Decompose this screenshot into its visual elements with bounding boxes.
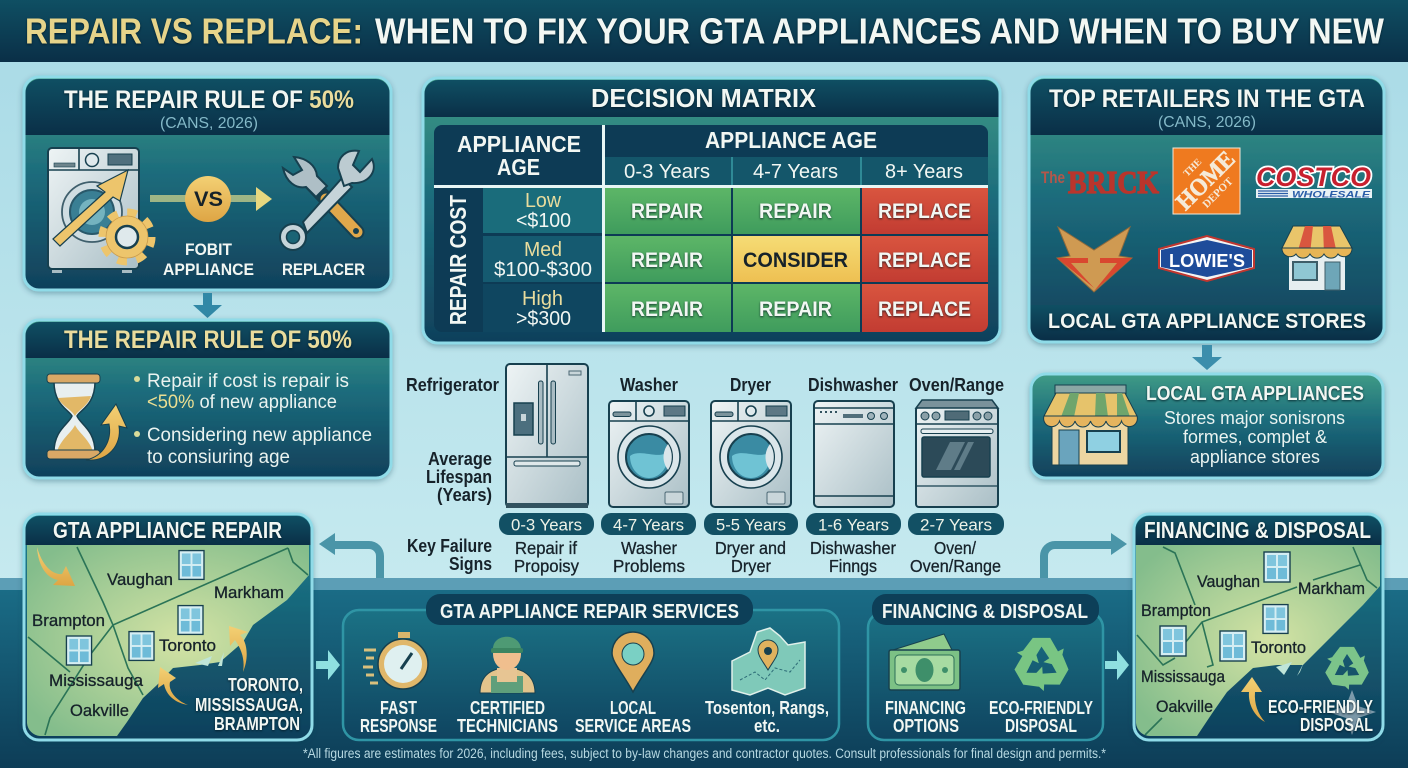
city labels: Markham (1298, 580, 1365, 598)
lifespan pills: 0-3 Years (511, 516, 582, 534)
city labels: Oakville (1156, 698, 1213, 716)
column headers: 0-3 Years (624, 161, 710, 183)
source note: (CANS, 2026) (1158, 114, 1256, 131)
column headers: AGE (497, 154, 540, 180)
failure signs: Propoisy (514, 556, 579, 576)
failure signs: Finngs (829, 556, 877, 576)
heading: THE REPAIR RULE OF 50% (64, 86, 354, 114)
failure signs: Dryer and (715, 538, 786, 558)
heading: GTA APPLIANCE REPAIR (53, 517, 282, 543)
icon: stopwatch (363, 632, 428, 689)
icon: refrigerator (506, 364, 588, 508)
icon: oven range (916, 400, 998, 507)
matrix table (434, 125, 988, 332)
icon: dishwasher (814, 401, 894, 507)
row labels: appliance lifespan: Refrigerator (406, 375, 499, 395)
bullet list: to consiuring age (147, 447, 290, 468)
decision cells: REPAIR (631, 298, 703, 321)
appliance names: Dishwasher (808, 375, 898, 395)
bullet list: Repair if cost is repair is (147, 371, 349, 392)
arrow: elbow to financing map (1040, 533, 1127, 578)
arrow: map to services (316, 650, 340, 680)
icon: map markers (66, 551, 204, 665)
logo: the brick: BRICK (1068, 164, 1159, 200)
decision cells: REPAIR (631, 249, 703, 272)
lifespan pills: 2-7 Years (920, 516, 992, 534)
disposal label (1268, 697, 1373, 735)
logo: the brick (1041, 164, 1159, 200)
panel: local GTA appliances (1031, 374, 1383, 478)
column headers: 4-7 Years (753, 161, 838, 183)
footer label: LOCAL GTA APPLIANCE STORES (1048, 310, 1366, 333)
heading: GTA APPLIANCE REPAIR SERVICES (440, 601, 739, 623)
sparkle watermark (1328, 690, 1376, 735)
service area label: TORONTO, (228, 675, 303, 695)
failure signs: Oven/ (934, 538, 976, 558)
heading: THE REPAIR RULE OF 50% (64, 326, 352, 354)
arrow: financing to map (1105, 650, 1129, 680)
row headers: Med (524, 239, 562, 261)
appliance names: Dryer (730, 375, 771, 395)
city labels: Mississauga (49, 671, 144, 690)
service labels: Tosenton, Rangs, (705, 698, 829, 718)
service area label (195, 675, 303, 734)
lifespan pills: 5-5 Years (716, 516, 786, 534)
column headers: APPLIANCE (457, 131, 581, 157)
icon: washer (609, 401, 689, 507)
heading: LOCAL GTA APPLIANCES (1146, 383, 1364, 405)
lifespan pills: 4-7 Years (613, 516, 684, 534)
row headers (445, 190, 592, 330)
city labels: Vaughan (1197, 573, 1260, 591)
row labels: appliance lifespan: Signs (449, 554, 492, 574)
row labels: appliance lifespan: Lifespan (426, 467, 492, 487)
city labels: Mississauga (1141, 668, 1226, 686)
service labels: SERVICE AREAS (575, 716, 691, 736)
city labels (1141, 573, 1365, 716)
city labels: Brampton (1141, 602, 1211, 620)
description: appliance stores (1190, 447, 1320, 467)
lifespan pills: 1-6 Years (818, 516, 889, 534)
decision cells: REPAIR (759, 200, 832, 223)
icon: recycle (1008, 638, 1073, 696)
logo: the home depot: HOME (1171, 146, 1241, 216)
icon: washer with arrow and gear (48, 148, 151, 273)
city labels: Markham (214, 583, 284, 602)
city labels: Vaughan (107, 570, 173, 589)
panel: repair services (343, 594, 839, 740)
description: formes, complet & (1183, 427, 1327, 447)
logo: costco wholesale: WHOLESALE (1292, 190, 1371, 200)
icon: money (889, 634, 960, 690)
icon: hourglass with arrow (47, 374, 127, 460)
service area label: MISSISSAUGA, (195, 695, 303, 715)
financing labels: ECO-FRIENDLY (989, 698, 1093, 718)
arrow on map (1241, 677, 1265, 722)
row headers: $100-$300 (494, 259, 592, 281)
description (1164, 408, 1345, 467)
financing labels (885, 698, 1093, 736)
heading: DECISION MATRIX (591, 83, 817, 113)
decision cells (605, 188, 988, 332)
arrows on map (37, 547, 248, 705)
failure signs: Repair if (515, 538, 577, 558)
logo: the brick: The (1041, 168, 1065, 187)
financing labels: OPTIONS (893, 716, 959, 736)
row headers: <$100 (516, 210, 571, 232)
panel: decision matrix (423, 78, 1000, 343)
row labels: appliance lifespan (406, 375, 499, 574)
city labels: Toronto (1251, 639, 1306, 657)
icon labels: APPLIANCE (163, 260, 254, 279)
column headers: 8+ Years (885, 161, 963, 183)
logo: shield (1057, 227, 1132, 292)
disposal label: ECO-FRIENDLY (1268, 697, 1373, 717)
panel: financing and disposal map (1134, 514, 1383, 740)
logo: lowes (1159, 236, 1254, 281)
logo: lowes: LOWIE'S (1169, 251, 1245, 271)
decision cells: CONSIDER (743, 249, 848, 272)
failure signs: Problems (613, 556, 685, 576)
bullet list: <50% of new appliance (147, 392, 337, 413)
panel: financing and disposal (868, 594, 1103, 740)
financing labels: FINANCING (885, 698, 966, 718)
service labels: LOCAL (610, 698, 656, 718)
failure signs (514, 538, 1001, 576)
failure signs: Dryer (731, 556, 771, 576)
row labels: appliance lifespan: Key Failure (407, 536, 492, 556)
decision cells: REPLACE (878, 298, 971, 321)
logo: the home depot: THE (1182, 156, 1205, 179)
appliance names: Oven/Range (909, 375, 1004, 395)
service labels: RESPONSE (360, 716, 437, 736)
source note: (CANS, 2026) (160, 115, 258, 132)
icon: technician (480, 637, 535, 693)
decision cells: REPLACE (878, 249, 971, 272)
bottom band (0, 578, 1408, 768)
map land (27, 545, 309, 736)
row labels: appliance lifespan: (Years) (437, 485, 492, 505)
lifespan pills (499, 513, 1004, 535)
service labels: TECHNICIANS (457, 716, 558, 736)
city labels: Toronto (159, 636, 216, 655)
panel: top retailers (1029, 77, 1384, 342)
icon: crossed wrenches (280, 151, 374, 250)
description: Stores major sonisrons (1164, 408, 1345, 428)
icon labels (163, 240, 365, 279)
appliance names: Washer (620, 375, 678, 395)
appliance names (620, 375, 1004, 395)
arrow: retailers to local stores (1192, 345, 1222, 370)
bullet list: Considering new appliance (147, 425, 372, 446)
city labels: Oakville (70, 701, 129, 720)
decision cells: REPAIR (759, 298, 832, 321)
row headers: High (522, 288, 563, 310)
service labels: CERTIFIED (470, 698, 545, 718)
logo: costco wholesale: COSTCO (1256, 162, 1371, 192)
financing labels: DISPOSAL (1005, 716, 1077, 736)
arrow: versus connector (150, 176, 272, 222)
failure signs: Dishwasher (810, 538, 896, 558)
title banner: REPAIR VS REPLACE: (25, 10, 363, 52)
icon labels: FOBIT (185, 240, 233, 259)
row headers: >$300 (516, 308, 571, 330)
failure signs: Oven/Range (910, 556, 1001, 576)
row labels: appliance lifespan: Average (428, 449, 492, 469)
service labels: FAST (380, 698, 417, 718)
arrow: elbow to repair map (319, 533, 384, 578)
failure signs: Washer (621, 538, 677, 558)
icon: storefront (1282, 226, 1352, 290)
icon: location pin (612, 632, 654, 692)
footnote: *All figures are estimates for 2026, including fees, subject to by-law changes and contractor quotes. Consult professionals for final design and permits.* (303, 746, 1107, 761)
icon: map markers (1160, 552, 1290, 661)
panel: GTA appliance repair map (24, 514, 312, 740)
logo: the home depot: DEPOT (1200, 175, 1236, 211)
column headers (457, 127, 963, 183)
icon labels: REPLACER (282, 260, 365, 279)
service labels (360, 698, 829, 736)
decision cells: REPLACE (878, 200, 971, 223)
icon: recycle on map (1320, 647, 1373, 694)
decision cells: REPAIR (631, 200, 703, 223)
service area label: BRAMPTON (214, 714, 300, 734)
title banner (0, 0, 1408, 62)
panel: repair rule details (24, 320, 391, 478)
row headers: REPAIR COST (445, 195, 471, 325)
column headers: APPLIANCE AGE (705, 127, 877, 153)
icon: dryer (711, 401, 791, 507)
disposal label: DISPOSAL (1300, 715, 1373, 735)
row headers: Low (525, 190, 562, 212)
city labels (32, 570, 284, 720)
icon: local storefront (1044, 385, 1137, 465)
arrow: rule to rule detail (193, 293, 222, 318)
map land (1136, 545, 1380, 736)
city labels: Brampton (32, 611, 105, 630)
bullet list (134, 371, 372, 468)
service labels: etc. (754, 716, 780, 736)
heading: FINANCING & DISPOSAL (882, 601, 1088, 623)
icon: service map (732, 628, 805, 695)
arrow: versus connector: VS (194, 188, 223, 211)
panel: repair rule of 50% with icons (24, 77, 391, 290)
heading: TOP RETAILERS IN THE GTA (1049, 85, 1365, 113)
